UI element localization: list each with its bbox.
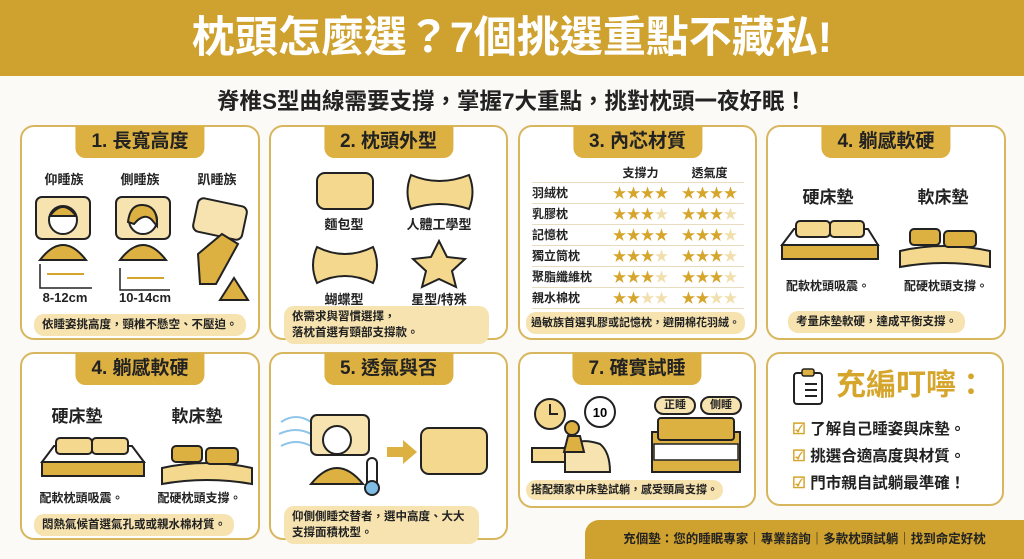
header band xyxy=(0,0,1024,76)
panel: 4 softness (top): 硬床墊 xyxy=(802,188,854,207)
panel: 2 shape: 星型/特殊 xyxy=(411,292,467,307)
note 4 xyxy=(788,311,965,333)
note 2 xyxy=(284,306,489,344)
rating table: 聚脂纖維枕 xyxy=(532,270,592,284)
heading 4 xyxy=(821,126,951,158)
rating table: ★★★★ xyxy=(612,248,668,264)
rating table: 記憶枕 xyxy=(532,228,568,242)
panel: 2 shape: 蝴蝶型 xyxy=(324,292,364,307)
note 5: 仰側側睡交替者，選中高度、大大支撐面積枕型。 xyxy=(292,511,464,539)
panel: 4 softness (top) xyxy=(766,125,1006,340)
note 5 xyxy=(284,506,479,544)
note 7 xyxy=(526,480,723,500)
heading 5: 5. 透氣與否 xyxy=(340,358,437,379)
checklist: ☑ 門市親自試躺最準確！ xyxy=(792,475,965,492)
rating table: 乳膠枕 xyxy=(532,207,568,221)
breathing illustration xyxy=(278,414,488,496)
trial illustration xyxy=(531,396,741,473)
panel: 4 softness (top): 配軟枕頭吸震。 xyxy=(786,279,870,293)
rating table: 獨立筒枕 xyxy=(532,249,580,263)
note 1 xyxy=(34,314,246,336)
heading 5 xyxy=(324,353,453,385)
panel: 4 softness (bottom) xyxy=(20,352,260,540)
note 1: 依睡姿挑高度，頸椎不懸空、不壓迫。 xyxy=(42,319,238,331)
note 3: 過敏族首選乳膠或記憶枕，避開棉花羽絨。 xyxy=(531,317,740,329)
rating table: ★★★★ xyxy=(681,206,737,222)
heading 4b: 4. 躺感軟硬 xyxy=(91,358,189,379)
panel: 4 softness (top): 軟床墊 xyxy=(918,188,968,207)
subtitle: 脊椎S型曲線需要支撐，掌握7大重點，挑對枕頭一夜好眠！ xyxy=(217,89,807,114)
footer band: 充個墊：您的睡眠專家｜專業諮詢｜多款枕頭試躺｜找到命定好枕 xyxy=(623,532,986,546)
mattress icons xyxy=(780,220,991,268)
heading 7 xyxy=(572,353,702,385)
rating table: ★★★★ xyxy=(681,248,737,264)
panel: 3 material xyxy=(518,125,757,340)
panel: 4 softness (top): 配硬枕頭支撐。 xyxy=(904,279,988,293)
labels: 仰睡族 xyxy=(44,172,84,187)
heading 2 xyxy=(324,126,453,158)
panel: 1 size: 10-14cm xyxy=(119,290,171,305)
panel: reminders xyxy=(766,352,1004,506)
footer band xyxy=(585,520,1024,559)
heading 1: 1. 長寬高度 xyxy=(91,131,189,152)
panel: 7 trial: 側睡 xyxy=(710,399,732,411)
heading 3 xyxy=(573,126,702,158)
heading 7: 7. 確實試睡 xyxy=(588,358,686,379)
icon: clipboard xyxy=(793,368,823,405)
reminder heading: 充編叮嚀： xyxy=(836,369,986,402)
note 7: 搭配類家中床墊試躺，感受頸肩支撐。 xyxy=(531,484,718,496)
pills xyxy=(654,396,696,415)
panel: 4 softness (bottom): 配軟枕頭吸震。 xyxy=(39,491,124,505)
heading 3: 3. 內芯材質 xyxy=(589,131,686,152)
panel: 5 breathability xyxy=(269,352,508,540)
heading 4: 4. 躺感軟硬 xyxy=(837,131,935,152)
rating table: ★★★★ xyxy=(681,268,737,284)
checklist xyxy=(792,420,965,492)
checklist: ☑ 了解自己睡姿與床墊。 xyxy=(792,421,965,438)
panel: 1 size: 側睡族 xyxy=(120,172,160,187)
rating table: 親水棉枕 xyxy=(532,291,580,305)
rating table: 支撐力 xyxy=(622,166,658,180)
note 4b: 悶熱氣候首選氣孔或或親水棉材質。 xyxy=(42,519,226,531)
heading 1 xyxy=(75,126,205,158)
panel: 7 trial xyxy=(518,352,756,508)
panel: 1 size: 趴睡族 xyxy=(197,172,236,187)
note 2: 落枕首選有頸部支撐款。 xyxy=(292,327,418,339)
rating table: ★★★★ xyxy=(681,226,737,242)
heading 4b xyxy=(75,353,205,385)
panel: 2 shape xyxy=(269,125,508,340)
panel: 2 shape: 人體工學型 xyxy=(406,217,472,232)
note 2: 依需求與習慣選擇， xyxy=(292,311,396,323)
rating table: 羽絨枕 xyxy=(532,186,568,200)
rating table: ★★★★ xyxy=(612,184,668,200)
checklist: ☑ 挑選合適高度與材質。 xyxy=(792,448,965,465)
pills: 正睡 xyxy=(664,399,686,411)
panel: 1 size xyxy=(20,125,260,340)
rating table: 透氣度 xyxy=(691,166,727,180)
title: 枕頭怎麼選？7個挑選重點不藏私! xyxy=(192,14,832,62)
panel: 4 softness (bottom): 軟床墊 xyxy=(172,407,222,426)
note 3 xyxy=(526,312,745,334)
rating table: ★★★★ xyxy=(612,206,668,222)
note 4: 考量床墊軟硬，達成平衡支撐。 xyxy=(796,316,957,328)
panel: 4 softness (bottom): 硬床墊 xyxy=(52,407,102,426)
rating table: ★★★★ xyxy=(681,290,737,306)
pillow icons xyxy=(312,172,474,289)
panel: 2 shape: 麵包型 xyxy=(324,217,364,232)
rating table: ★★★★ xyxy=(612,226,668,242)
rating table xyxy=(532,166,744,309)
mattress icons b xyxy=(40,437,253,486)
rating table: ★★★★ xyxy=(612,290,668,306)
icons sleepers xyxy=(35,196,250,301)
rating table: ★★★★ xyxy=(681,184,737,200)
rating table: ★★★★ xyxy=(612,268,668,284)
note 4b xyxy=(34,514,234,536)
trial illustration: 10 xyxy=(593,405,607,420)
panel: 4 softness (bottom): 配硬枕頭支撐。 xyxy=(157,491,242,505)
heights: 8-12cm xyxy=(43,290,87,305)
heading 2: 2. 枕頭外型 xyxy=(340,131,437,152)
